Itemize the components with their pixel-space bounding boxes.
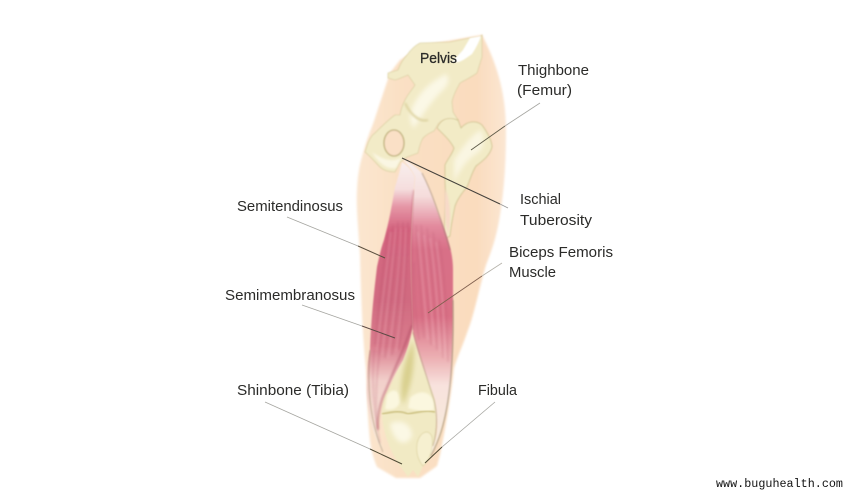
- label: Thighbone (Femur): Thighbone: [518, 63, 589, 79]
- label: Biceps Femoris Muscle: Biceps Femoris: [509, 245, 613, 261]
- label: Ischial Tuberosity: Tuberosity: [520, 213, 593, 229]
- leader line: biceps femoris: [428, 263, 502, 313]
- leader line: fibula: [425, 402, 495, 463]
- label: Thighbone (Femur): [517, 63, 589, 99]
- label: Semitendinosus: Semitendinosus: [237, 199, 343, 215]
- white notch in pelvis: [452, 36, 481, 62]
- label: Fibula: Fibula: [478, 383, 518, 399]
- leader line: semimembranosus: [302, 305, 395, 338]
- leader line: ischial tuberosity: [402, 158, 508, 208]
- knee joint bones: [382, 333, 436, 477]
- fibula head: [417, 432, 433, 466]
- leader line: femur: [471, 103, 540, 150]
- label: Biceps Femoris Muscle: [509, 245, 613, 281]
- label: Ischial Tuberosity: Ischial: [520, 192, 561, 208]
- label: Pelvis: Pelvis: [420, 51, 457, 67]
- muscle: biceps femoris: [403, 160, 453, 457]
- muscle: semitendinosus and semimembranosus: [367, 162, 415, 453]
- label: Semimembranosus: Semimembranosus: [225, 288, 355, 304]
- label: Shinbone (Tibia): Shinbone (Tibia): [237, 383, 349, 399]
- femur bone: [437, 118, 492, 240]
- pelvis hole: [384, 130, 404, 156]
- label: Ischial Tuberosity: [520, 192, 593, 229]
- label: Thighbone (Femur): (Femur): [517, 83, 572, 99]
- pelvis bone: [365, 35, 482, 172]
- label: Biceps Femoris Muscle: Muscle: [509, 265, 556, 281]
- leader line: semitendinosus: [287, 217, 385, 258]
- leg silhouette: [357, 35, 506, 478]
- leader line: tibia: [265, 402, 402, 464]
